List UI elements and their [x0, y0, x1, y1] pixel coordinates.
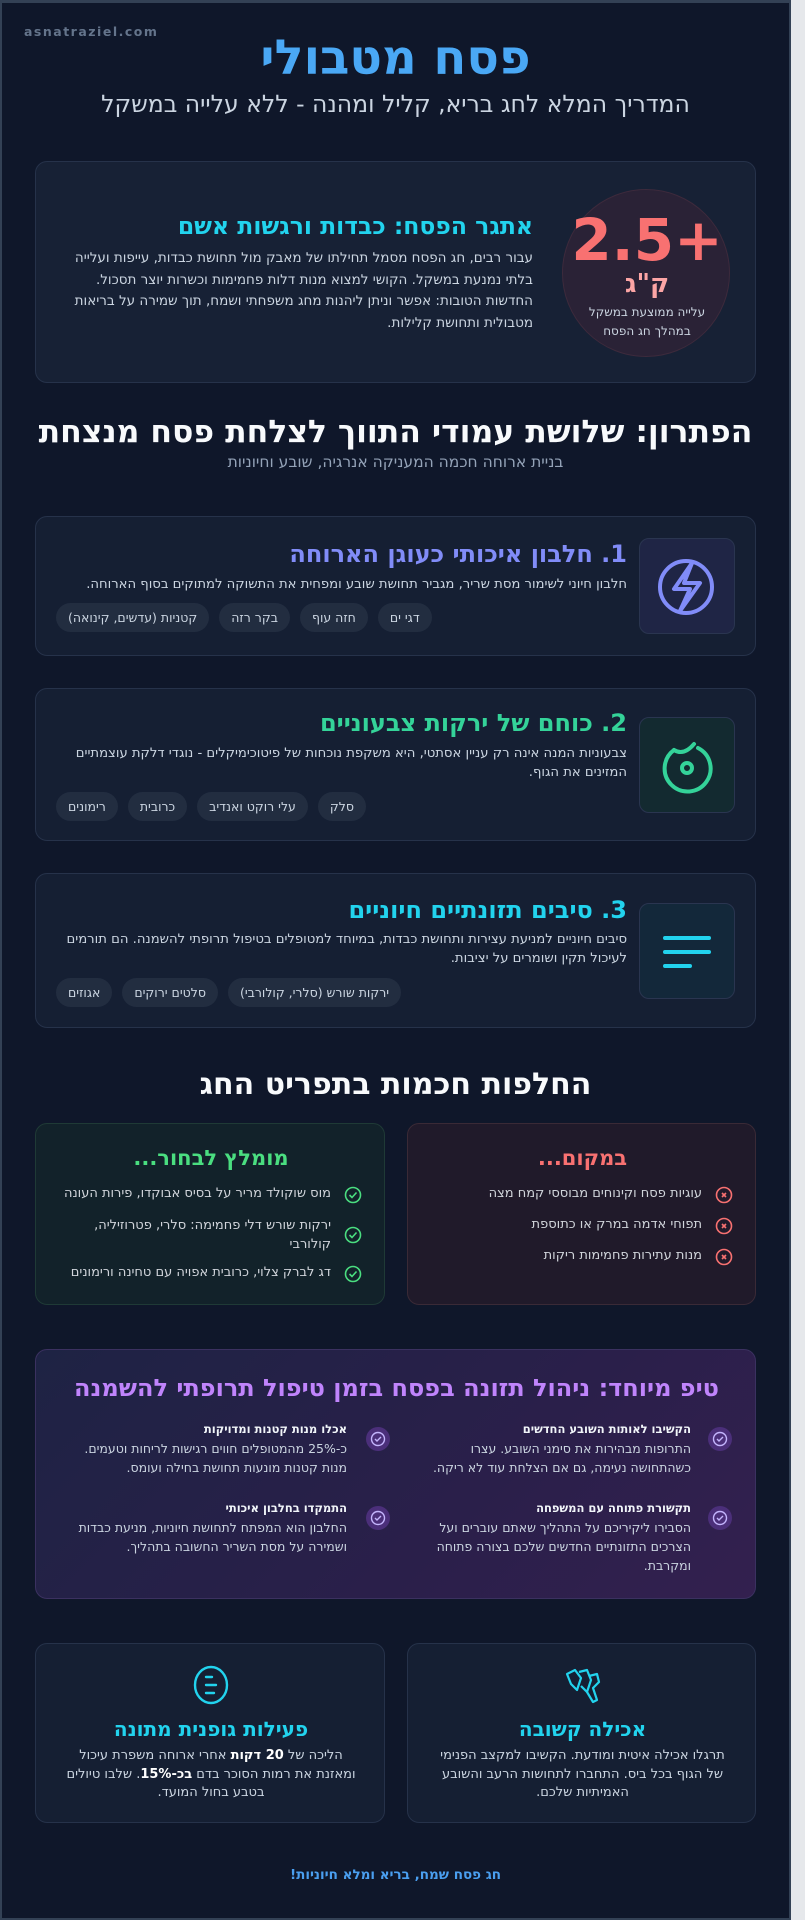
panel: pillar 3	[35, 873, 756, 1028]
tip: protein focus: החלבון הוא המפתח לתחושת חיוניות, מניעת כבדות ושמירה על מסת השריר החשובה בתהליך.	[79, 1520, 347, 1554]
icon: activity	[194, 1666, 228, 1704]
tip: protein focus: התמקדו בחלבון איכותי	[225, 1501, 347, 1515]
tip: small portions	[84, 1422, 390, 1475]
title: 2. כוחם של ירקות צבעוניים	[320, 709, 627, 737]
paragraph: עבור רבים, חג הפסח מסמל תחילתו של מאבק מול תחושת כבדות, עייפות ועלייה בלתי נמנעת במשקל. הקושי למצוא מנות דלות פחמימות וכשרות יוצר תסכול. החדשות הטובות: אפשר וניתן ליהנות מחג משפחתי ושמח, תוך שמירה על בריאות מטבולית ותחושת קלילות.	[75, 250, 533, 331]
stat number: 2.5+	[571, 206, 723, 274]
title: פסח מטבולי	[260, 30, 531, 86]
tip: hunger signals	[433, 1422, 732, 1475]
panel: challenge	[35, 161, 756, 383]
icon: fiber	[639, 903, 735, 999]
tip: protein focus	[78, 1501, 390, 1554]
tags: עלי רוקט ואנדיב	[209, 799, 296, 814]
tip: family communication: תקשורת פתוחה עם המשפחה	[536, 1501, 691, 1515]
heading: מומלץ לבחור...	[133, 1146, 289, 1170]
icon: vegetable	[639, 717, 735, 813]
text: הליכה של 20 דקות אחרי ארוחה משפרת עיכול ומאזנת את רמות הסוכר בדם בכ-15%. שלבו טיולים בטבע בחול המועד.	[66, 1748, 356, 1800]
tags: בקר רזה	[231, 610, 278, 625]
tags: אגוזים	[68, 985, 100, 1000]
list	[64, 1186, 362, 1282]
list: עוגיות פסח וקינוחים מבוססי קמח מצה	[489, 1186, 702, 1201]
tags: סלטים ירוקים	[134, 985, 206, 1000]
list: ירקות שורש דלי פחמימה: סלרי, פטרוזיליה, קולורבי	[94, 1218, 331, 1252]
tip: hunger signals: הקשיבו לאותות השובע החדשים	[523, 1422, 691, 1436]
tags: דגי ים	[390, 610, 420, 625]
section heading: swaps: החלפות חכמות בתפריט החג	[200, 1067, 591, 1102]
panel: mindful eating	[407, 1643, 756, 1823]
stat circle	[562, 189, 730, 357]
section subheading: בניית ארוחה חכמה המעניקה אנרגיה, שובע וחיוניות	[228, 453, 563, 471]
title: 1. חלבון איכותי כעוגן הארוחה	[289, 540, 627, 568]
tip: family communication	[437, 1501, 732, 1573]
title: פעילות גופנית מתונה	[114, 1717, 308, 1741]
tags: כרובית	[140, 799, 175, 814]
tags: חזה עוף	[312, 610, 356, 625]
tags	[56, 603, 432, 632]
list: דג לברק צלוי, כרובית אפויה עם טחינה ורימונים	[71, 1265, 331, 1280]
section heading: הפתרון: שלושת עמודי התווך לצלחת פסח מנצחת	[39, 414, 752, 450]
list: תפוחי אדמה במרק או כתוספת	[532, 1217, 702, 1232]
subtitle: המדריך המלא לחג בריא, קליל ומהנה - ללא עלייה במשקל	[101, 90, 690, 118]
tags: רימונים	[68, 799, 106, 814]
stat unit: ק"ג	[625, 269, 669, 299]
panel: pillar 2	[35, 688, 756, 841]
panel: special tip	[35, 1349, 756, 1599]
title: 3. סיבים תזונתיים חיוניים	[348, 896, 627, 924]
icon: hands	[566, 1668, 600, 1704]
tags: ירקות שורש (סלרי, קולורבי)	[240, 985, 389, 1000]
watermark: asnatraziel.com	[24, 24, 158, 39]
heading: במקום...	[538, 1146, 627, 1170]
panel: instead	[407, 1123, 756, 1305]
tags	[56, 978, 401, 1007]
tip: family communication: הסבירו ליקיריכם על התהליך שאתם עוברים ועל הצרכים התזונתיים החדשים שלכם בצורה פתוחה ומקרבת.	[437, 1520, 691, 1573]
footer: חג פסח שמח, בריא ומלא חיוניות!	[290, 1867, 501, 1883]
panel: recommended	[35, 1123, 385, 1305]
tags: קטניות (עדשים, קינואה)	[68, 610, 197, 625]
panel: physical activity	[35, 1643, 385, 1823]
list: מנות עתירות פחמימות ריקות	[544, 1248, 702, 1263]
title: אכילה קשובה	[519, 1717, 646, 1741]
tip heading: טיפ מיוחד: ניהול תזונה בפסח בזמן טיפול תרופתי להשמנה	[74, 1374, 719, 1402]
heading: אתגר הפסח: כבדות ורגשות אשם	[178, 212, 533, 240]
list	[489, 1186, 732, 1266]
description: חלבון חיוני לשימור מסת שריר, מגביר תחושת שובע ומפחית את התשוקה למתוקים בסוף הארוחה.	[86, 577, 627, 592]
tip: hunger signals: התרופות מבהירות את סימני השובע. עצרו כשהתחושה נעימה, גם אם הצלחת עוד לא ריקה.	[433, 1441, 691, 1475]
tip: small portions: אכלו מנות קטנות ומדויקות	[204, 1422, 347, 1436]
description: צבעוניות המנה אינה רק עניין אסתטי, היא משקפת נוכחות של פיטוכימיקלים - נוגדי דלקת עוצמתיים המזינים את הגוף.	[76, 746, 627, 780]
icon: protein	[639, 538, 735, 634]
tags: סלק	[330, 799, 354, 814]
tags	[56, 792, 366, 821]
list: מוס שוקולד מריר על בסיס אבוקדו, פירות העונה	[64, 1186, 331, 1201]
tip: small portions: כ-25% מהמטופלים חווים רגישות לריחות וטעמים. מנות קטנות מונעות תחושת בחילה ועומס.	[84, 1441, 347, 1475]
description: סיבים חיוניים למניעת עצירות ותחושת כבדות, במיוחד למטופלים בטיפול תרופתי להשמנה. הם תורמים לעיכול תקין ושומרים על יציבות.	[67, 932, 627, 966]
text: תרגלו אכילה איטית ומודעת. הקשיבו למקצב הפנימי של הגוף בכל ביס. התחברו לתחושות הרעב והשובע האמיתיות שלכם.	[440, 1748, 725, 1800]
panel: pillar 1	[35, 516, 756, 656]
stat caption: עלייה ממוצעת במשקל במהלך חג הפסח	[589, 305, 705, 338]
